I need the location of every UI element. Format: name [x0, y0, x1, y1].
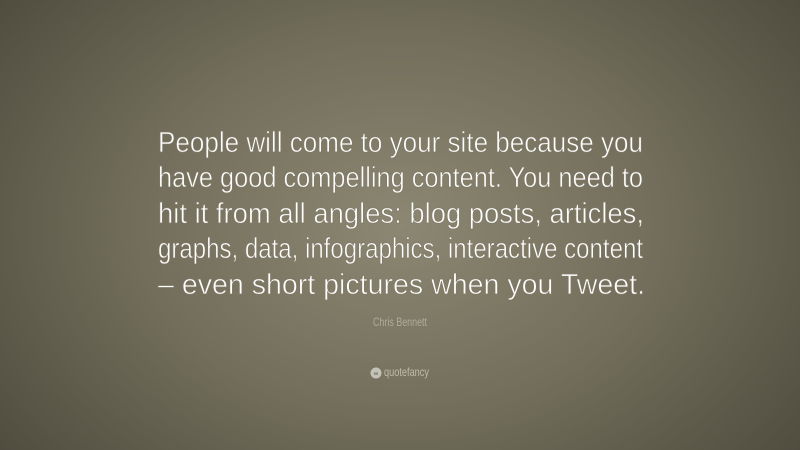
quote text: – even short pictures when you Tweet. [158, 269, 645, 301]
quote text [158, 127, 645, 301]
quote text: graphs, data, infographics, interactive content [158, 233, 643, 265]
brand name: quotefancy [384, 365, 429, 379]
author: Chris Bennett [373, 315, 427, 329]
quote text: have good compelling content. You need to [158, 162, 643, 194]
icon: quote mark: “ [374, 371, 378, 382]
quote text: People will come to your site because you [158, 127, 643, 159]
quote text: hit it from all angles: blog posts, articles, [158, 198, 644, 230]
quotefancy logo [370, 365, 429, 382]
